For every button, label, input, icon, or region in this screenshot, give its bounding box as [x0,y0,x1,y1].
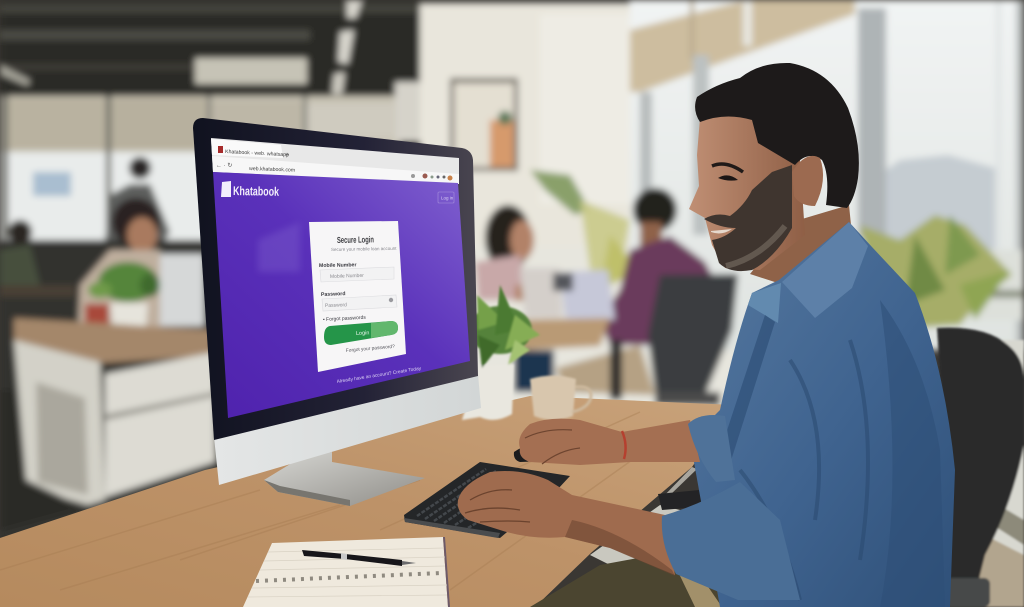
typing arm sleeve [662,482,800,600]
login button [324,321,398,345]
login button: Login [356,330,370,337]
monitor stand [264,452,425,506]
far left dark floor area [0,240,220,540]
header login button: Log in [441,196,454,200]
computer monitor [193,118,481,485]
shirt fold shadows [740,340,868,600]
header login button [438,192,454,203]
monitor bezel [193,118,478,440]
password field: Password [321,291,346,298]
background monitor left [158,254,204,326]
notebook ruled lines [248,548,447,597]
shirt placket [714,315,775,470]
right windows [630,0,1024,350]
card subtitle: Secure your mobile loan account [331,246,397,252]
mouse arm sleeve [688,415,735,482]
background man in purple shirt [556,188,720,395]
pen [302,550,416,566]
background woman at laptop [475,205,534,301]
navigation arrows: ← · ↻ [216,162,232,169]
neck [750,205,851,284]
purple login screen [213,172,470,418]
red bracelet [622,431,626,459]
foreground plant and mug [462,285,591,420]
typing arm [458,471,675,575]
man in blue shirt [458,63,955,607]
login card [309,221,406,372]
browser window chrome [211,138,459,184]
extension icons [411,174,452,180]
Khatabook logo [221,181,279,199]
back wall blinds and windows [0,96,400,246]
desk plant [462,285,540,420]
card title: Secure Login [337,234,374,245]
shirt collar [782,222,868,318]
forgot password link: Forgot your password? [346,344,395,354]
mouse arm [519,419,700,465]
smile [711,229,732,233]
eyebrow [712,164,743,172]
mobile number field: Mobile Number [319,262,356,269]
face [689,112,805,270]
beard [704,165,792,271]
address bar url: web.khatabook.com [249,166,295,174]
mobile number field: Mobile Number [330,273,364,280]
forgot password checkbox: ▪ Forgot passwords [323,315,366,323]
coffee mug [530,376,591,420]
finger lines on typing hand [465,490,530,522]
right plant [860,215,1012,330]
background office chair [610,274,738,406]
silver desk edge [660,467,697,500]
pale gap under desk [590,505,720,565]
notebook spiral [256,573,442,581]
desk top [0,396,735,607]
beard grey highlights [726,226,785,266]
forearm shading [565,520,675,576]
notebook [243,537,448,607]
window sill and floor right [950,340,1024,607]
chair armrest [658,488,722,510]
background desk [505,318,610,350]
eye [718,175,738,181]
standing colleague [105,157,170,240]
monitor chin [214,374,481,485]
ceiling [0,0,650,100]
seated woman left [78,198,160,330]
wall painting [450,78,518,171]
ear [792,156,823,206]
trousers [530,552,730,607]
seated colleague far left [0,220,40,285]
wall pillar [395,82,425,142]
finger lines on mouse hand [525,430,580,464]
screen reflection [258,222,300,272]
chair behind man [930,328,1024,607]
notebook and pen [243,537,450,607]
wood grain [0,412,660,590]
computer mouse [514,441,568,462]
head [689,63,859,271]
wooden desk [0,396,735,607]
rear shadow of shirt [880,300,945,607]
Khatabook logo: Khatabook [233,184,279,199]
mobile number field [319,262,394,282]
floor [0,390,110,530]
keyboard keys [417,469,548,528]
background plant behind people [530,170,640,290]
browser window chrome: + [285,152,289,159]
keyboard [404,462,570,538]
left plant in white pot [85,262,160,336]
background laptop [520,268,615,320]
tab title: Khatabook - web. whatsapp [225,149,289,158]
password field [321,291,397,311]
password field: Password [325,302,347,309]
shirt body [690,222,955,607]
left desk [0,285,215,505]
hair [695,63,859,208]
account footer text: Already have an account? Create Today [336,366,422,385]
